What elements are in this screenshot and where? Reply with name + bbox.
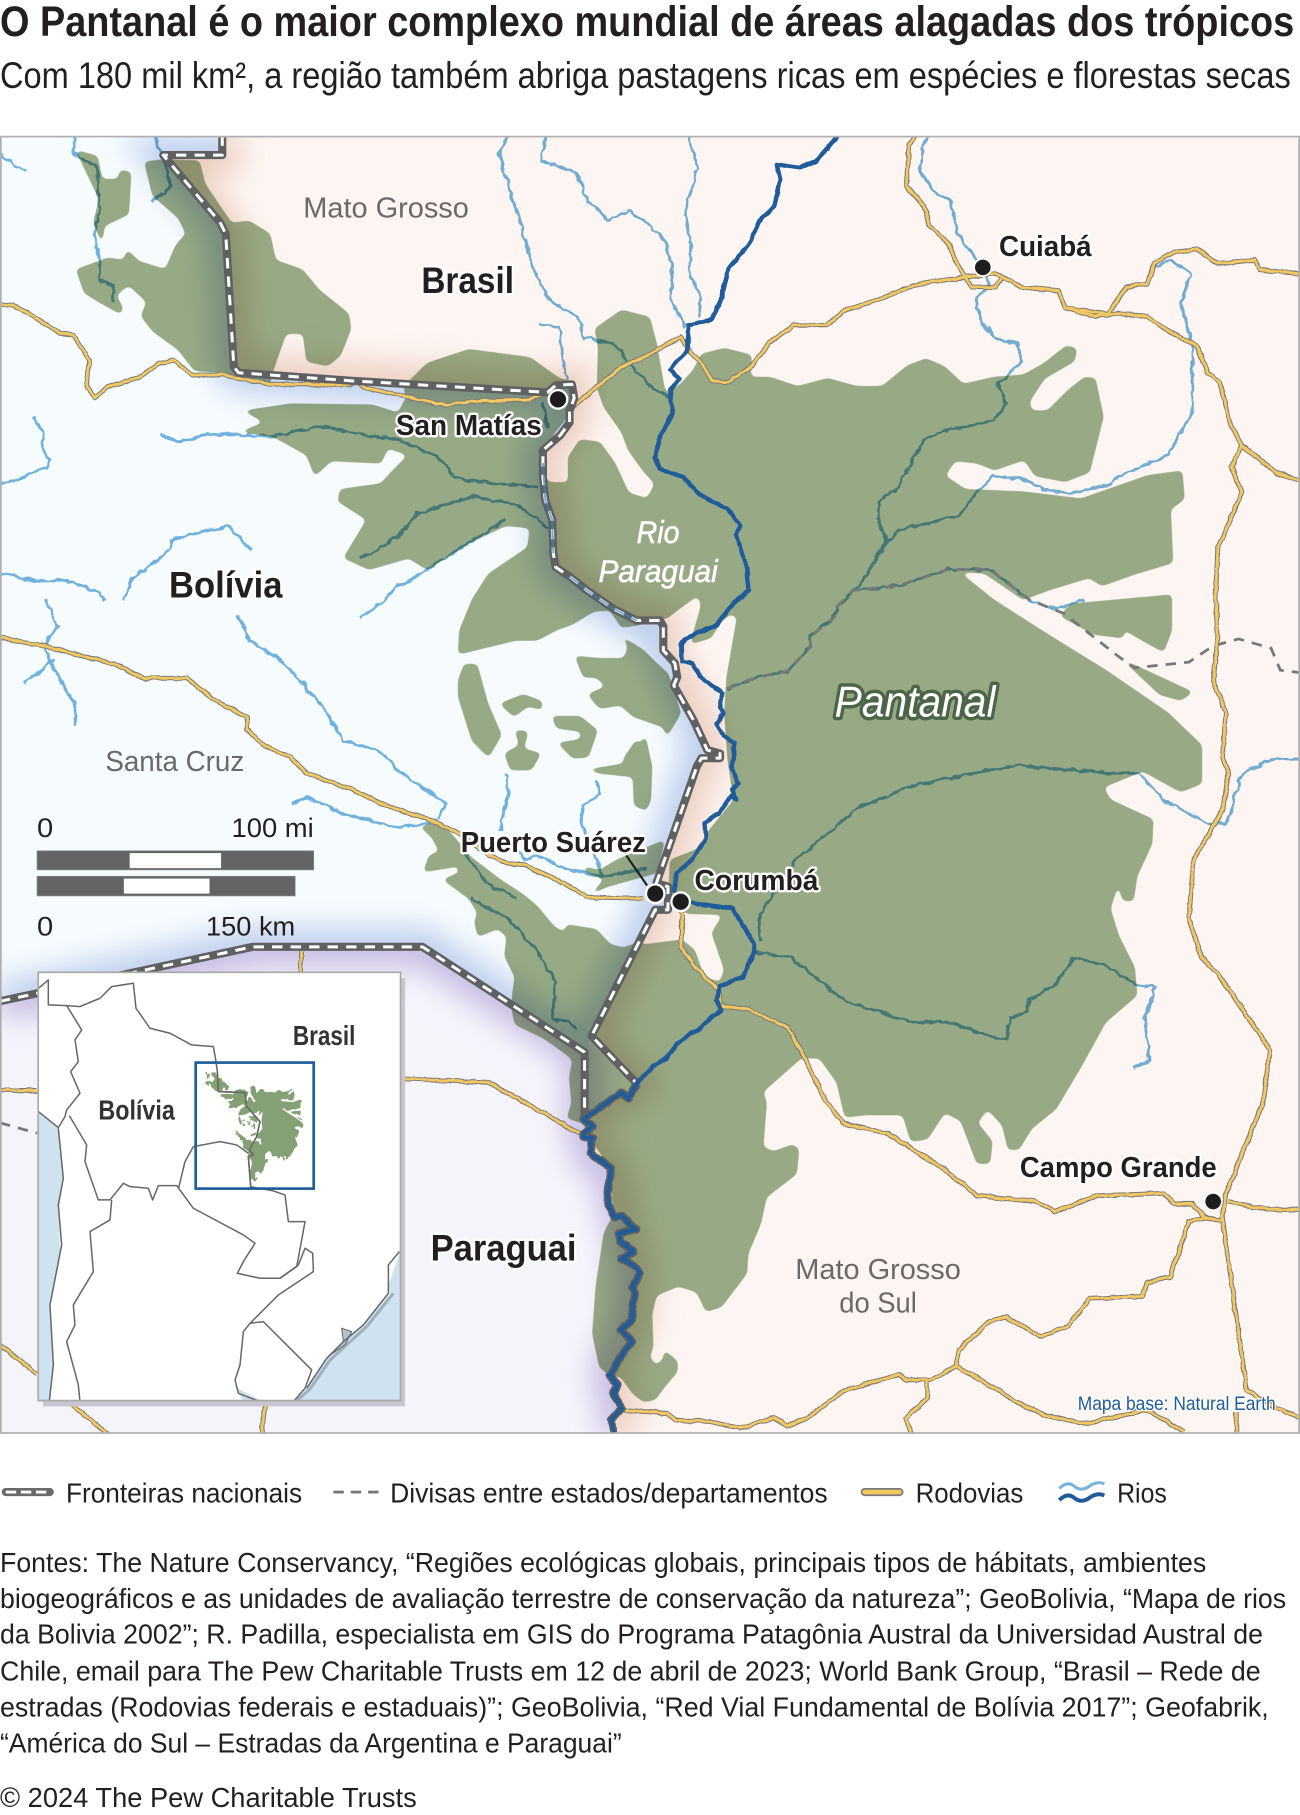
label: Puerto Suárez: Puerto Suárez [461,827,646,859]
label: Mato Grosso do Sul [798,1258,960,1313]
scale bar: 0 [37,813,53,843]
focus box [196,1063,314,1189]
sources: da Bolivia 2002”; R. Padilla, especialista em GIS do Programa Patagônia Austral da Universidad Austral de [0,1619,1263,1650]
sources: biogeográficos e as unidades de avaliação terrestre de conservação da natureza”; GeoBolivia, “Mapa de rios [0,1583,1286,1614]
label: Campo Grande: Campo Grande [1020,1152,1217,1184]
sources: “América do Sul – Estradas da Argentina e Paraguai” [0,1727,622,1758]
region: Brazil background [178,138,1298,1432]
Pantanal wetland area [76,150,1202,1402]
legend: rivers [1059,1477,1167,1508]
label: Paraguai: Paraguai [431,1227,576,1269]
label: Santa Cruz: Santa Cruz [105,746,244,778]
label: Corumbá: Corumbá [695,865,819,897]
legend: highways: Rodovias [916,1477,1023,1508]
label: Mato Grosso do Sul: Mato Grosso [795,1254,961,1286]
label: Mato Grosso: Mato Grosso [303,193,469,225]
city marker: Cuiabá [974,259,991,276]
sources: Fontes: The Nature Conservancy, “Regiões ecológicas globais, principais tipos de hábitats, ambientes [0,1547,1206,1578]
state and department divisions [0,570,1299,1133]
label: Mato Grosso do Sul: do Sul [839,1288,917,1320]
legend: rivers: Rios [1117,1477,1167,1508]
sources: Chile, email para The Pew Charitable Trusts em 12 de abril de 2023; World Bank Group, “Brasil – Rede de [0,1656,1261,1687]
Paraguay river [583,135,838,1435]
region: Paraguay background [0,947,640,1435]
label: Brasil: Brasil [421,259,514,301]
borders [37,980,399,1402]
highways [0,135,1300,1435]
label: Bolívia: Bolívia [169,563,283,605]
city marker: Corumbá [671,892,690,911]
city marker: San Matías [549,390,567,409]
city marker: Campo Grande [1204,1193,1222,1210]
map frame [1,137,1299,1433]
leader line: Puerto Suárez [626,855,647,886]
inset locator map: Bolívia [98,1094,175,1125]
label: Rio Paraguai [598,515,719,589]
inset locator map [37,972,401,1402]
scale bar: 100 mi [232,813,314,843]
legend [6,1477,1167,1508]
label: Cuiabá: Cuiabá [999,231,1092,263]
scale bar: 0 [37,911,53,941]
credit: base map: Mapa base: Natural Earth [1078,1393,1276,1415]
sources [0,1547,1286,1758]
inset shadow [43,978,405,1406]
legend: national borders: Fronteiras nacionais [66,1477,302,1508]
scale bar: 150 km [206,911,295,941]
national borders [0,135,720,1119]
legend: state divisions: Divisas entre estados/departamentos [390,1477,828,1508]
Paraguay river border section [583,1083,640,1435]
sea [37,1112,401,1402]
panel: map [0,135,1300,1435]
copyright: © 2024 The Pew Charitable Trusts [0,1782,417,1813]
inset locator map: Brasil [293,1020,355,1051]
label: Pantanal: Pantanal [835,678,997,727]
city marker: Puerto Suárez [646,884,664,903]
label: Rio Paraguai: Rio [637,515,680,550]
sources: estradas (Rodovias federais e estaduais)”; GeoBolivia, “Red Vial Fundamental de Bolívia 2017”; Geofabrik, [0,1692,1269,1723]
label: San Matías: San Matías [396,410,542,442]
label: Rio Paraguai: Paraguai [598,554,719,589]
scale bar [37,813,314,941]
secondary rivers [0,135,1300,1068]
Pantanal mini [205,1072,303,1181]
region: Bolivia background [0,135,720,1052]
